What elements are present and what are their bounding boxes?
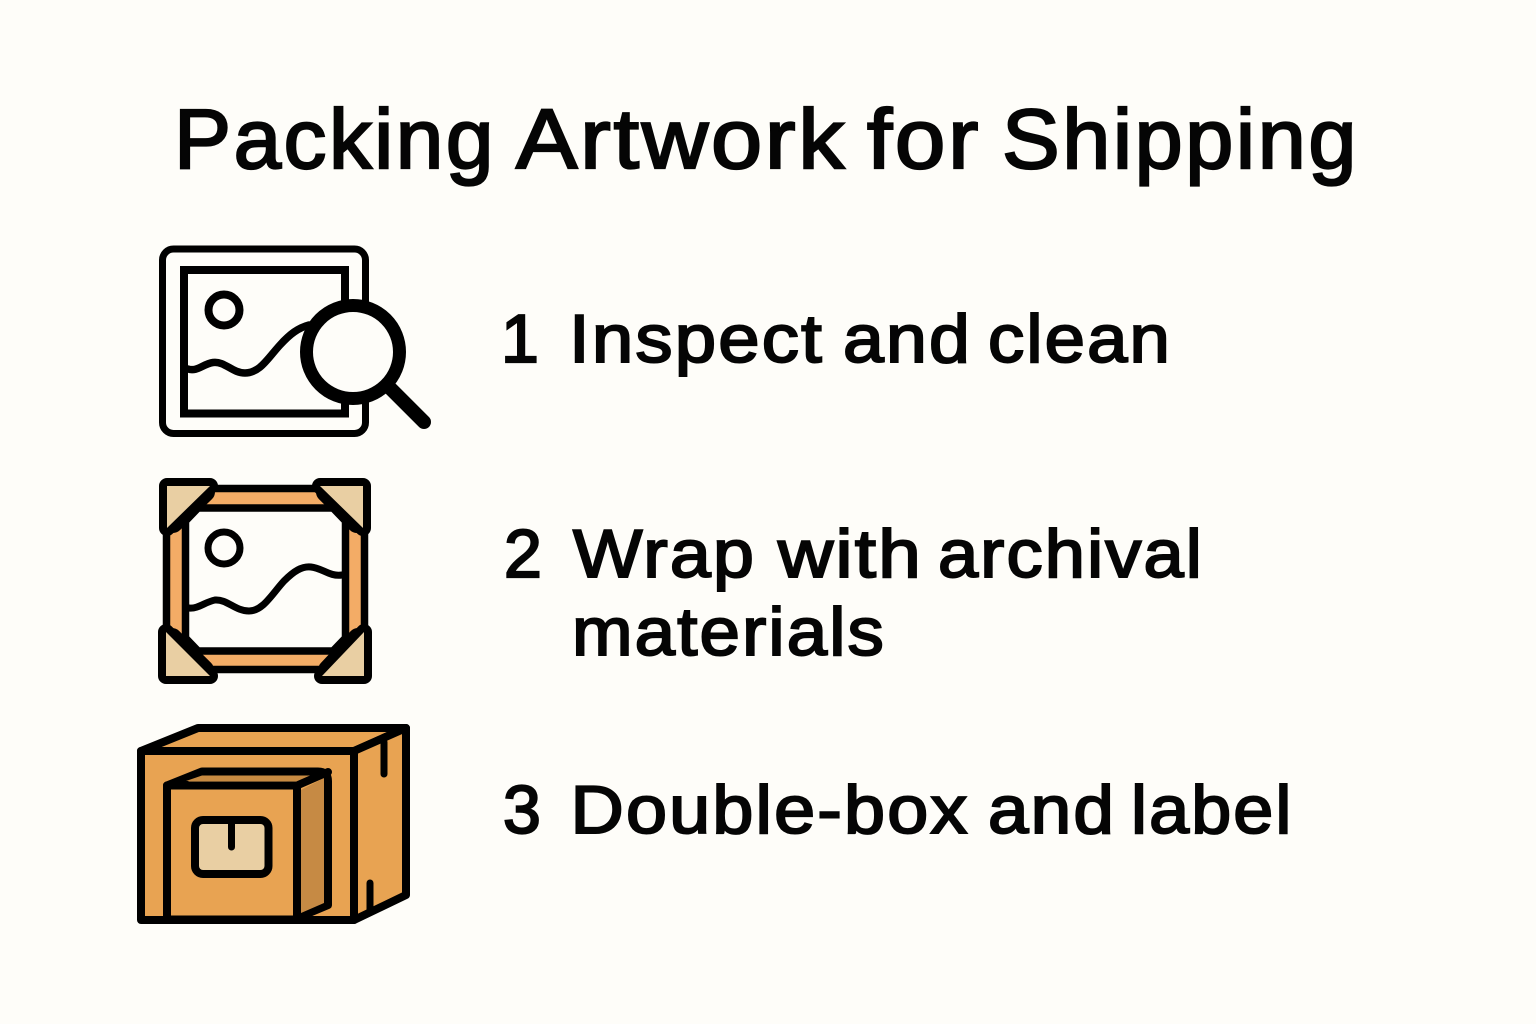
step label: wrap with archival materials: archival [938, 516, 1204, 592]
title: for [867, 92, 981, 186]
step number 3: 3 [503, 772, 541, 848]
step 1: inspect and clean [162, 249, 1172, 434]
step label: wrap with archival materials: Wrap [573, 516, 756, 592]
corner protector: bottom right [322, 632, 364, 676]
step number 2: 2 [504, 516, 542, 592]
step 2: wrap with archival materials [166, 486, 1225, 676]
step label: inspect and clean: clean [988, 301, 1172, 377]
title: Packing [174, 92, 496, 186]
title: Shipping [1002, 92, 1359, 186]
icon: picture wrapped with corner protectors [166, 486, 364, 676]
step label: inspect and clean: Inspect [569, 301, 824, 377]
step label: double-box and label: label [1131, 772, 1294, 848]
step label: wrap with archival materials: materials [572, 594, 886, 670]
step label: double-box and label: Double-box [570, 772, 970, 848]
corner protector: top left [167, 486, 210, 528]
icon: small box inside a larger shipping box [141, 728, 406, 920]
title: Artwork [516, 92, 847, 186]
icon: package label [195, 820, 268, 874]
step label: inspect and clean: and [843, 301, 972, 377]
step label: wrap with archival materials: with [777, 516, 923, 592]
corner protector: bottom left [166, 632, 210, 676]
icon: framed picture with magnifying glass [162, 249, 424, 434]
step 3: double-box and label [141, 728, 1294, 920]
corner protector: top right [320, 486, 363, 528]
step number 1: 1 [501, 301, 539, 377]
step label: double-box and label: and [988, 772, 1116, 848]
